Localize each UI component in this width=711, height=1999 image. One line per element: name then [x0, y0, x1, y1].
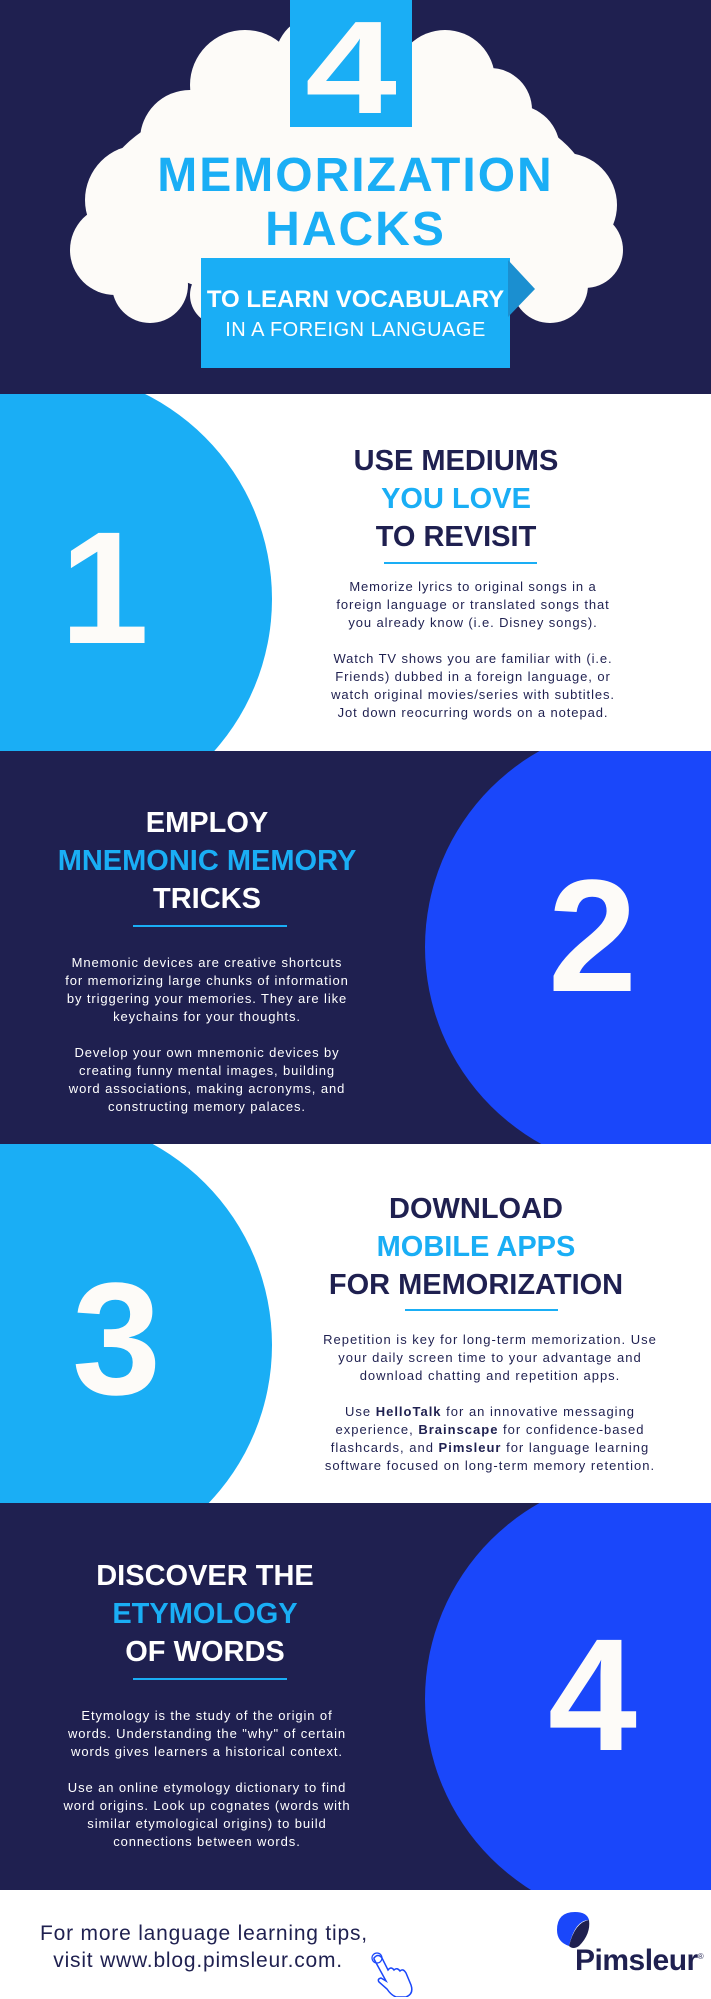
body 2: Mnemonic devices are creative shortcuts [72, 955, 342, 970]
body 3: Use HelloTalk for an innovative messaging [345, 1404, 635, 1419]
heading 4: DISCOVER THE [96, 1560, 314, 1592]
body 3: experience, Brainscape for confidence-based [336, 1422, 644, 1437]
body 2: word associations, making acronyms, and [69, 1081, 345, 1096]
cloud [70, 26, 623, 323]
header panel [0, 0, 711, 394]
footer text: For more language learning tips, [40, 1922, 368, 1945]
big number 4 box [290, 0, 412, 127]
body 4: similar etymological origins) to build [87, 1816, 327, 1831]
body 3: download chatting and repetition apps. [360, 1368, 620, 1383]
body 3: Repetition is key for long-term memorization. Use [323, 1332, 657, 1347]
heading 2: TRICKS [153, 883, 261, 915]
body 4 [63, 1708, 351, 1849]
number 2: 2 [548, 846, 637, 1025]
footer text: visit www.blog.pimsleur.com. [53, 1949, 343, 1972]
body 3: your daily screen time to your advantage and [338, 1350, 642, 1365]
body 1: Watch TV shows you are familiar with (i.e. [333, 651, 613, 666]
heading 2 [58, 807, 356, 915]
circle 3 [0, 1116, 272, 1574]
heading 1: YOU LOVE [381, 483, 531, 515]
body 2: keychains for your thoughts. [113, 1009, 301, 1024]
heading 3: FOR MEMORIZATION [329, 1269, 623, 1301]
panel: hack 2 [0, 751, 711, 1144]
body 4: words gives learners a historical context. [71, 1744, 343, 1759]
heading 4: ETYMOLOGY [112, 1598, 298, 1630]
logo: Pimsleur [557, 1912, 704, 1977]
circle 4 [425, 1474, 711, 1924]
body 1: foreign language or translated songs that [336, 597, 610, 612]
heading 2: EMPLOY [146, 807, 268, 839]
body 2: constructing memory palaces. [108, 1099, 306, 1114]
logo: Pimsleur: Pimsleur® [575, 1944, 703, 1977]
body 1: watch original movies/series with subtitles. [331, 687, 615, 702]
circle 1 [0, 370, 272, 828]
subtitle banner: TO LEARN VOCABULARY [207, 286, 504, 313]
body 4: Etymology is the study of the origin of [81, 1708, 333, 1723]
subtitle banner [201, 258, 535, 368]
heading 3 [329, 1193, 623, 1301]
title: HACKS [265, 203, 446, 256]
body 4: words. Understanding the "why" of certain [68, 1726, 346, 1741]
heading 2: MNEMONIC MEMORY [58, 845, 356, 877]
body 2 [65, 955, 349, 1114]
subtitle banner: IN A FOREIGN LANGUAGE [225, 319, 486, 341]
footer [0, 1890, 711, 1999]
number 3: 3 [72, 1249, 161, 1428]
heading 1 [354, 445, 558, 553]
body 2: creating funny mental images, building [79, 1063, 335, 1078]
number 1: 1 [60, 498, 149, 677]
panel: hack 1 [0, 394, 711, 751]
body 4: connections between words. [113, 1834, 301, 1849]
heading 3: MOBILE APPS [377, 1231, 575, 1263]
panel: hack 3 [0, 1144, 711, 1503]
heading 1: TO REVISIT [376, 521, 536, 553]
title [157, 149, 554, 256]
heading 1: USE MEDIUMS [354, 445, 558, 477]
body 4: Use an online etymology dictionary to find [68, 1780, 346, 1795]
body 2: for memorizing large chunks of information [65, 973, 349, 988]
body 1: Jot down reocurring words on a notepad. [338, 705, 608, 720]
body 3: flashcards, and Pimsleur for language learning [331, 1440, 649, 1455]
heading 4 [96, 1560, 314, 1668]
icon: pointing hand [371, 1952, 413, 1997]
body 4: word origins. Look up cognates (words with [63, 1798, 351, 1813]
heading 3: DOWNLOAD [389, 1193, 563, 1225]
body 2: Develop your own mnemonic devices by [74, 1045, 340, 1060]
number 4: 4 [548, 1605, 637, 1784]
body 1: Memorize lyrics to original songs in a [349, 579, 597, 594]
panel: hack 4 [0, 1503, 711, 1890]
body 2: by triggering your memories. They are like [67, 991, 347, 1006]
circle 2 [425, 722, 711, 1172]
heading 4: OF WORDS [125, 1636, 285, 1668]
footer text [40, 1922, 368, 1972]
body 1: you already know (i.e. Disney songs). [348, 615, 598, 630]
body 3: software focused on long-term memory retention. [325, 1458, 655, 1473]
body 3 [323, 1332, 657, 1473]
body 1 [331, 579, 615, 720]
body 1: Friends) dubbed in a foreign language, or [335, 669, 611, 684]
title: MEMORIZATION [157, 149, 554, 202]
